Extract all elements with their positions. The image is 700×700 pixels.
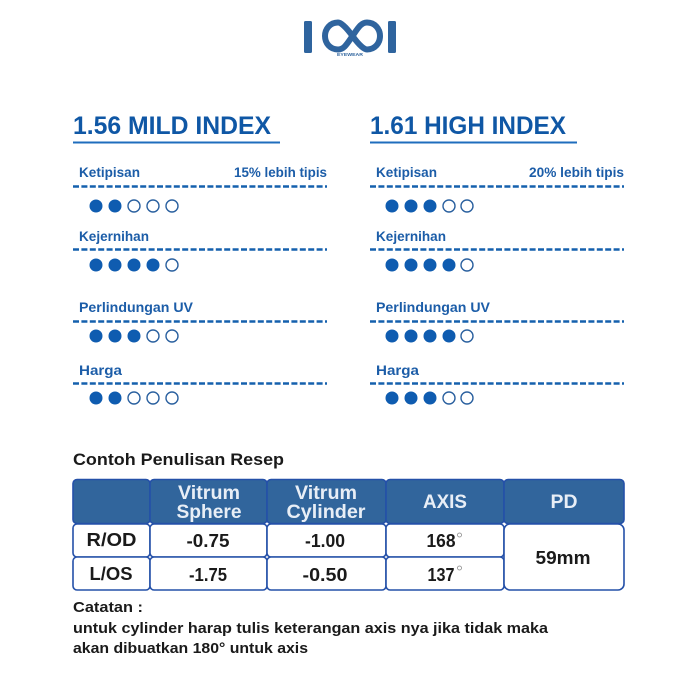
table row: L/OS: -1.75 bbox=[189, 565, 227, 585]
row: kejernihan: Kejernihan bbox=[376, 228, 446, 244]
table row: R/OD: -1.00 bbox=[305, 531, 345, 551]
row: perlindungan uv: Perlindungan UV bbox=[79, 299, 194, 315]
notes: untuk cylinder harap tulis keterangan axis nya jika tidak maka bbox=[73, 620, 549, 637]
table row: L/OS: -0.50 bbox=[302, 565, 348, 585]
notes bbox=[73, 599, 549, 657]
row: ketipisan bbox=[73, 164, 327, 212]
row: harga: Harga bbox=[376, 362, 419, 378]
row: kejernihan: Kejernihan bbox=[79, 228, 149, 244]
table header row: Cylinder bbox=[286, 502, 366, 523]
heading: 1.56 mild index: 1.56 MILD INDEX bbox=[73, 112, 271, 140]
table header row: PD bbox=[550, 492, 578, 513]
panel: 1.56 mild index bbox=[73, 112, 327, 404]
panel: 1.61 high index bbox=[370, 112, 624, 404]
table cell: PD value bbox=[504, 524, 624, 590]
row: ketipisan: 15% lebih tipis bbox=[234, 164, 327, 180]
table: prescription example bbox=[73, 480, 624, 590]
table cell: PD value: 59mm bbox=[536, 548, 590, 568]
row: perlindungan uv bbox=[73, 299, 327, 342]
row: perlindungan uv: Perlindungan UV bbox=[376, 299, 491, 315]
row: harga: Harga bbox=[79, 362, 122, 378]
table row: R/OD: -0.75 bbox=[186, 531, 230, 551]
row: ketipisan bbox=[370, 164, 624, 212]
table row: L/OS: 137 bbox=[428, 565, 454, 585]
row: harga bbox=[370, 362, 624, 404]
notes: Catatan : bbox=[73, 599, 143, 616]
table row: L/OS bbox=[73, 557, 504, 590]
table header row: Sphere bbox=[176, 502, 242, 523]
table header row: Vitrum bbox=[178, 483, 240, 504]
table header row bbox=[73, 480, 624, 524]
logo: 1001 eyewear bbox=[304, 21, 396, 57]
row: kejernihan bbox=[370, 228, 624, 271]
table row: L/OS: L/OS bbox=[90, 564, 132, 584]
logo: 1001 eyewear: EYEWEAR bbox=[337, 52, 364, 57]
row: kejernihan bbox=[73, 228, 327, 271]
heading: contoh penulisan resep: Contoh Penulisan Resep bbox=[73, 450, 284, 469]
table row: R/OD bbox=[73, 524, 504, 557]
row: ketipisan: 20% lebih tipis bbox=[529, 164, 624, 180]
row: ketipisan: Ketipisan bbox=[79, 164, 140, 180]
notes: akan dibuatkan 180° untuk axis bbox=[73, 640, 308, 657]
row: harga bbox=[73, 362, 327, 404]
table row: R/OD: R/OD bbox=[86, 530, 137, 550]
row: ketipisan: Ketipisan bbox=[376, 164, 437, 180]
table row: R/OD: 168 bbox=[426, 531, 456, 551]
table header row: AXIS bbox=[423, 492, 467, 513]
heading: 1.61 high index: 1.61 HIGH INDEX bbox=[370, 112, 566, 140]
table header row: Vitrum bbox=[295, 483, 357, 504]
row: perlindungan uv bbox=[370, 299, 624, 342]
